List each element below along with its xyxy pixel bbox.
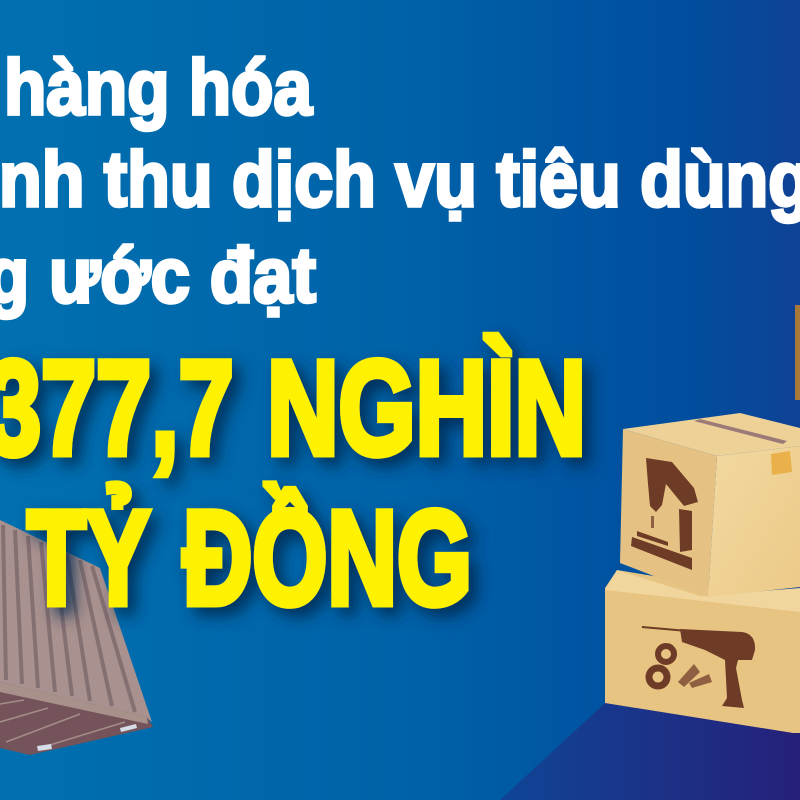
lower box: [605, 570, 800, 733]
heading: intro lines: [0, 43, 800, 319]
figure line 1: 377,7 NGHÌN: [0, 334, 586, 483]
figure line 2: TỶ ĐỒNG: [27, 484, 472, 633]
icon: drill and gears: [642, 626, 755, 708]
line 1: hàng hóa: [4, 43, 313, 131]
big figure: [0, 334, 586, 633]
floor corner: [500, 700, 800, 800]
shipping container: [0, 520, 153, 755]
cardboard box stack: [605, 413, 800, 733]
upper box: [620, 413, 800, 597]
icon: drill press: [631, 458, 698, 570]
sliver of top box: [795, 305, 800, 400]
